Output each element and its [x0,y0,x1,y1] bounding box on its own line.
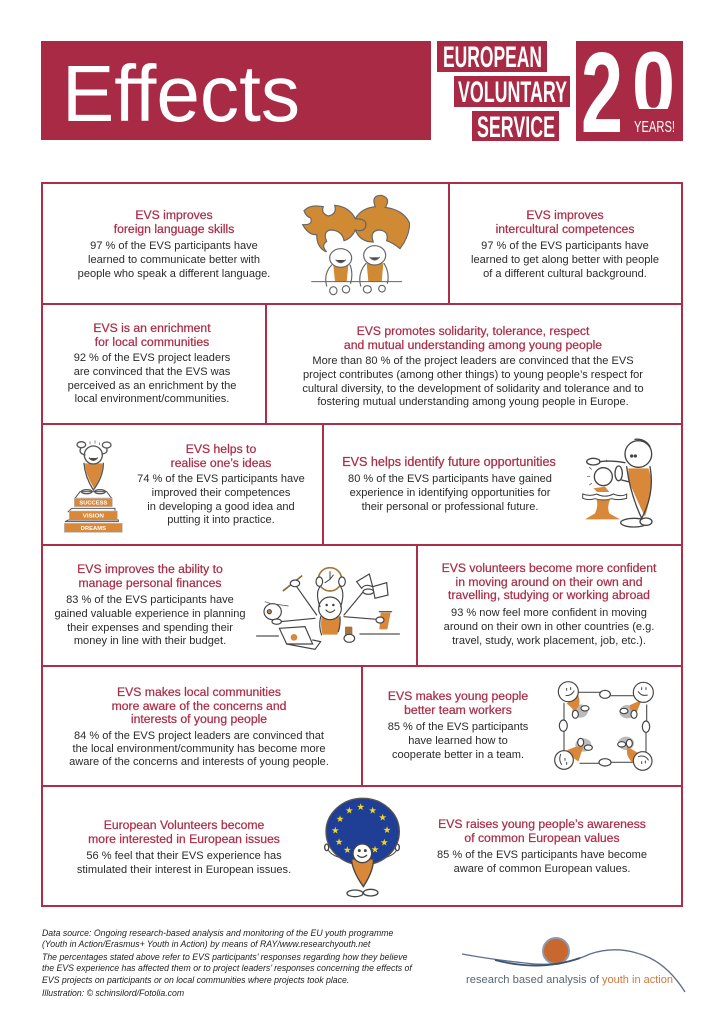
body text: 80 % of the EVS participants have gained [348,473,552,485]
icon: person holding EU flag globe: ★ [371,844,379,855]
heading: EVS volunteers become more confident [442,561,656,575]
body text: 92 % of the EVS project leaders [74,352,230,364]
heading: travelling, studying or working abroad [448,588,650,602]
body text: people who speak a different language. [78,268,270,280]
body text: project contributes (among other things) to young people’s respect for [303,369,643,381]
heading [77,562,223,590]
title banner [41,41,431,140]
body text: local environment/communities. [75,393,229,405]
body text: their personal or professional future. [362,501,538,513]
body text: European issues: stimulated their interest in European issues. [77,864,291,876]
icon: person holding EU flag globe: ★ [335,837,343,848]
panel: foreign language skills [41,182,450,305]
body text: 97 % of the EVS participants have [90,240,258,252]
heading: European values: of common European values [464,831,620,845]
body text: in developing a good idea and [147,501,295,513]
heading [388,689,528,717]
body text: their expenses and spending their [67,622,233,634]
panel: future opportunities [322,423,683,546]
heading: and mutual understanding among young people [344,338,602,352]
heading: realise one’s ideas [171,456,271,470]
icon: figure on steps of dreams, vision, success [64,440,123,533]
heading: intercultural competences [496,222,634,236]
panel: local communities more aware [41,665,363,787]
icon: person holding EU flag globe: ★ [380,838,389,849]
body text: are convinced that the EVS was [74,366,230,378]
body text: learned to get along better with people [471,254,659,266]
footnote: percentages explanation: The percentages stated above refer to EVS participants’ responses regarding how they believe [42,952,407,962]
heading: EVS improves the ability to [77,562,223,576]
body text: experience in identifying opportunities for [350,487,550,499]
body text: of a different cultural background. [483,268,647,280]
icon: person holding EU flag globe: ★ [378,813,387,824]
body text: 97 % of the EVS participants have [481,240,649,252]
icon: person holding EU flag globe: ★ [345,806,354,817]
body text: European values [437,849,647,875]
body text: 93 % now feel more confident in moving [451,607,647,619]
panel: solidarity, tolerance, respect [265,303,683,425]
panel: personal finances [41,544,418,667]
footnote: illustration credit: Illustration: © schinsilord/Fotolia.com [42,988,184,998]
body text: travel, study, work placement, job, etc.). [452,635,646,647]
body text: fostering mutual understanding among young people in Europe. [317,396,629,408]
icon: person holding EU flag globe: ★ [356,802,365,813]
body text: improved their competences [152,487,290,499]
heading: EVS promotes solidarity, tolerance, respect [357,324,589,338]
body text [444,607,654,647]
heading: EVS helps to [186,442,256,456]
panel: European issues and values [41,785,683,907]
heading: European issues: more interested in European issues [88,832,280,846]
icon: figure on steps of dreams, vision, success: VISION [83,513,104,519]
body text: cultural diversity, to the development of solidarity and tolerance and to [302,383,644,395]
footnote: data source: (Youth in Action/Erasmus+ Youth in Action) by means of RAY/www.researchyouth.net [42,939,370,949]
body text [471,240,659,280]
heading: interests of young people [131,712,267,726]
body text: cooperate better in a team. [392,749,524,761]
heading: in moving around on their own and [455,575,642,589]
icon: multitasking person with many arms [256,566,400,650]
body text [302,355,644,408]
icon: person holding EU flag globe [324,798,400,898]
heading: EVS is an enrichment [93,321,211,335]
footnote: data source [42,928,393,949]
body text: perceived as an enrichment by the [68,380,236,392]
body text: 83 % of the EVS participants have [66,594,234,606]
logo: research based analysis of youth in action: research based analysis of [466,974,600,986]
heading: European values [438,817,646,845]
icon: person holding EU flag globe: ★ [331,826,340,837]
panel: realise one's ideas [41,423,324,546]
heading: better team workers [404,703,512,717]
icon: four people linked in a team [554,681,654,771]
icon: person holding EU flag globe: ★ [368,805,377,816]
icon: two people under puzzle pieces [302,194,410,296]
panel: better team workers [361,665,683,787]
body text: around on their own in other countries (e.g. [444,621,654,633]
icon: person holding EU flag globe: ★ [336,814,344,825]
icon: person holding EU flag globe: ★ [383,825,391,836]
body text [137,473,305,526]
body text: More than 80 % of the project leaders are convinced that the EVS [312,355,634,367]
heading: EVS makes young people [388,689,528,703]
footnote: percentages explanation: EVS projects on participants or on local communities where projects took place. [42,975,349,985]
heading: European issues: European Volunteers become [104,818,264,832]
panel: intercultural competences [448,182,683,305]
heading: EVS improves [135,208,213,222]
body text: aware of the concerns and interests of young people. [69,756,329,768]
body text [348,473,552,513]
panel: enrichment for local communities [41,303,267,425]
body text: putting it into practice. [167,514,275,526]
body text [69,730,329,768]
body text: gained valuable experience in planning [54,608,246,620]
heading [114,208,234,236]
body text [68,352,236,405]
body text: European values: 85 % of the EVS participants have become [437,849,647,861]
logo: research based analysis of youth in action [462,937,686,992]
body text: 85 % of the EVS participants [388,721,528,733]
body text [78,240,270,280]
heading: for local communities [95,335,209,349]
heading: foreign language skills [114,222,234,236]
heading [112,685,286,726]
logo: European Voluntary Service [437,41,570,141]
heading: EVS helps identify future opportunities [342,455,556,469]
heading [93,321,211,349]
body text: 84 % of the EVS project leaders are convinced that [74,730,324,742]
heading: European issues [88,818,280,846]
footnote: percentages explanation [42,952,412,985]
heading [496,208,634,236]
body text: have learned how to [408,735,508,747]
body text [388,721,528,761]
heading: more aware of the concerns and [112,699,286,713]
panel: more confident [416,544,683,667]
body text [54,594,246,647]
body text: 74 % of the EVS participants have [137,473,305,485]
heading: manage personal finances [79,576,221,590]
heading: EVS improves [526,208,604,222]
body text: European issues: 56 % feel that their EVS experience has [86,850,282,862]
logo: research based analysis of youth in action: youth in action [602,974,673,986]
icon: figure on steps of dreams, vision, success: SUCCESS [79,501,108,507]
body text: European issues [77,850,291,876]
icon: figure on steps of dreams, vision, success: DREAMS [81,526,106,532]
heading: European values: EVS raises young people’s awareness [438,817,646,831]
body text: money in line with their budget. [74,635,226,647]
footnote: percentages explanation: the EVS experience has affected them or to project leaders’ responses concerning the effects of [42,963,412,973]
heading [442,561,656,602]
body text: learned to communicate better with [88,254,260,266]
icon: teacher and student at desk [582,438,653,528]
heading: EVS makes local communities [117,685,281,699]
heading [171,442,271,470]
icon: person holding EU flag globe: ★ [343,845,352,856]
body text: European values: aware of common European values. [454,863,630,875]
footnote: data source: Data source: Ongoing research-based analysis and monitoring of the EU youth programme [42,928,393,938]
body text: the local environment/community has become more [73,743,325,755]
logo: 20 years [576,41,683,141]
title text: Effects [62,49,300,138]
heading [344,324,602,352]
